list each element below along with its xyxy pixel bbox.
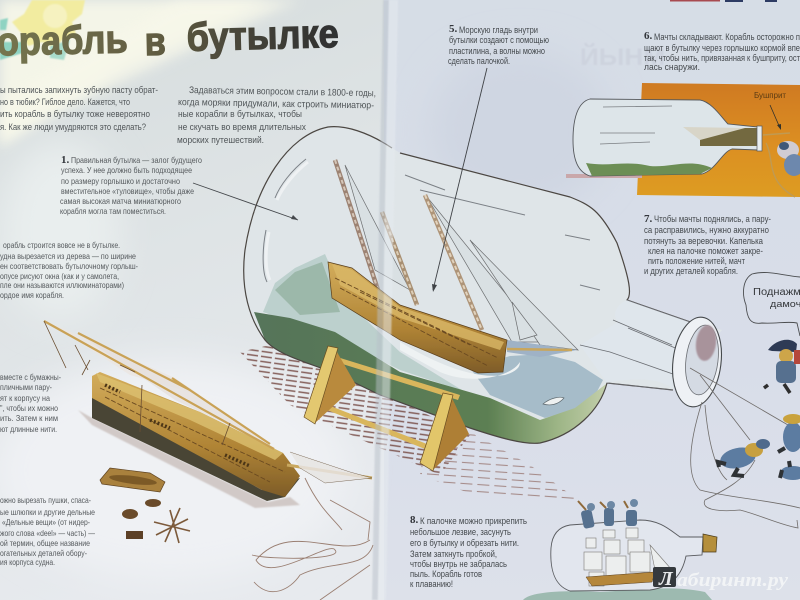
step 6 text: лась снаружи. — [644, 62, 700, 72]
green sea — [586, 163, 712, 176]
ship deck — [586, 572, 655, 586]
step 2 text: орабль строится вовсе не в бутылке. — [3, 240, 120, 250]
sailor pulling rope centre — [718, 439, 770, 476]
gear decoration behind title — [0, 0, 85, 60]
step 6 text — [644, 30, 800, 72]
intro text right: когда моряки придумали, как строить миниатюр- — [178, 97, 374, 111]
step 4 text: ые шлюпки и другие дельные — [0, 507, 95, 517]
step 1 text: успеха. У нее должно быть подходящее — [61, 165, 192, 175]
step 3 text — [0, 372, 61, 434]
sailor seated — [764, 340, 800, 393]
step 2 text: ордое имя корабля. — [0, 290, 64, 300]
intro text right: морских путешествий. — [177, 135, 264, 146]
step 2 text: удна вырезается из дерева — по ширине — [0, 251, 136, 261]
intro text left: ы пытались запихнуть зубную пасту обрат- — [0, 85, 158, 96]
step 6 orange panel with bottle — [566, 83, 800, 197]
watermark — [653, 567, 789, 591]
step 7 text: клея на палочке поможет закре- — [648, 246, 763, 256]
step 4 text: ожно вырезать пушки, спаса- — [0, 495, 91, 505]
step 1 text — [60, 154, 202, 216]
pink shadow — [566, 174, 642, 178]
left model ship — [44, 321, 373, 600]
neck collar — [757, 126, 762, 151]
step 4 text: огательных деталей обору- — [0, 548, 87, 558]
cannon parts — [122, 509, 138, 519]
watermark: Л — [658, 568, 674, 590]
masts — [335, 160, 482, 330]
bowsprit arrow — [770, 105, 781, 130]
sails — [48, 322, 200, 395]
small parts: boat, cannons, wheel — [100, 468, 190, 543]
water — [263, 254, 540, 420]
sailor pulling rope right — [778, 414, 800, 452]
step 8 text: его в бутылку и обрезать нити. — [410, 538, 519, 548]
step 2 text: опусе рисуют окна (как и у самолета, — [0, 271, 119, 281]
step 5 text: сделать палочкой. — [448, 56, 510, 66]
bottle neck — [580, 300, 693, 388]
step 4 text: жого слова «deel» — часть) — — [0, 528, 95, 538]
step 4 text: «Дельные вещи» (от нидер- — [2, 517, 90, 527]
step 1 text: корабля могла там поместиться. — [60, 206, 166, 216]
step 8 text: чтобы внутрь не забралась — [410, 559, 507, 569]
bottle outline — [244, 127, 693, 443]
title — [0, 12, 339, 65]
intro text right: ные корабли в бутылках, чтобы — [178, 109, 302, 120]
gutter — [372, 0, 389, 600]
intro text left: ить корабль в бутылку тоже невероятно — [0, 109, 150, 120]
rigging threads — [252, 478, 373, 600]
big bottle illustration — [244, 127, 726, 443]
sea bed green — [254, 312, 606, 443]
pointer arrow step 5 — [432, 68, 487, 292]
step 2 text: пле они называются иллюминаторами) — [0, 280, 124, 290]
bottle mouth — [668, 314, 726, 410]
bowsprit — [287, 465, 372, 478]
ship shadow — [78, 410, 300, 508]
step 3 text: вместе с бумажны- — [0, 372, 61, 382]
step 8 text: пыль. Корабль готов — [410, 569, 482, 579]
three sailors on bottle — [578, 499, 638, 529]
step 3 text: ить. Затем к ним — [0, 413, 58, 423]
sailor lying — [780, 461, 800, 480]
decorative colour strip at page top — [670, 0, 777, 2]
step 3 text: ют длинные нити. — [0, 424, 57, 434]
glass highlights — [263, 159, 600, 290]
step 5 text: пластилина, а волны можно — [449, 46, 545, 56]
step 5 text: Морскую гладь внутри — [459, 25, 538, 35]
step 6 text: 6. — [644, 30, 652, 42]
bottle glass — [244, 127, 722, 443]
step 7 text: 7. — [644, 213, 652, 225]
step 8 text: небольшое лезвие, засунуть — [410, 527, 511, 537]
sailor pulling thread — [763, 133, 800, 197]
intro text left — [0, 85, 158, 133]
step 7 text — [644, 213, 771, 276]
step 8 text: к плаванию! — [410, 579, 453, 589]
step 8 text: К палочке можно прикрепить — [420, 516, 527, 526]
step 1 text: 1. — [61, 154, 70, 166]
step 5 text: бутылки создают с помощью — [449, 35, 549, 45]
hull — [92, 372, 300, 497]
ghost print-through title: ЙЫНМ — [580, 43, 665, 71]
white sails — [584, 528, 672, 586]
pointer arrow step 1 — [193, 183, 298, 220]
small bottle — [573, 99, 758, 176]
keel — [92, 395, 300, 501]
folded ship — [700, 128, 757, 146]
step 2 text: ен соответствовать бутылочному горлыш- — [0, 261, 138, 271]
intro text right — [177, 85, 376, 146]
foam — [400, 342, 520, 379]
step 3 text: ят к корпусу на — [0, 393, 50, 403]
step 4 text — [0, 495, 95, 567]
intro text left: но в тюбик? Гиблое дело. Кажется, что — [0, 97, 130, 108]
bowsprit — [507, 349, 572, 350]
step 7 text: потянуть за веревочки. Капелька — [644, 236, 763, 246]
step 3 text: ", чтобы их можно — [0, 403, 58, 413]
whale-like foam mark — [543, 397, 564, 405]
speech bubble — [744, 272, 800, 336]
step 7 text: пить положение нитей, мачт — [648, 256, 745, 266]
title: в — [144, 20, 166, 64]
step 4 text: ия корпуса судна. — [0, 557, 55, 567]
bottle — [551, 520, 703, 591]
intro text right: Задаваться этим вопросом стали в 1800-е годы, — [189, 85, 376, 99]
step 7 text: Чтобы мачты поднялись, а пару- — [654, 214, 771, 224]
step 4 text: ой термин, общее название — [0, 538, 90, 548]
sea — [523, 588, 712, 600]
step 7 text: са расправились, нужно аккуратно — [644, 225, 769, 235]
watermark: абиринт.ру — [677, 570, 789, 591]
intro text left: я. Как же люди умудряются это сделать? — [0, 122, 146, 133]
ship hull in bottle — [328, 262, 507, 373]
step 3 text: пличными пару- — [0, 382, 52, 392]
sails — [345, 165, 578, 350]
hatched shadow under big bottle — [240, 345, 578, 500]
step 8 text: Затем заткнуть пробкой, — [410, 549, 497, 559]
capstan wheel — [154, 508, 190, 543]
boat — [100, 468, 165, 492]
step 8 text: 8. — [410, 514, 418, 526]
glass lines — [600, 106, 672, 144]
step 5 text — [448, 23, 549, 66]
cork — [703, 534, 717, 552]
bowsprit label: Бушприт — [754, 91, 786, 100]
step 5 text: 5. — [449, 23, 458, 35]
step 1 text: по размеру горлышко и достаточно — [61, 176, 180, 186]
masts — [44, 321, 274, 449]
intro text right: не скучать во время длительных — [178, 122, 306, 133]
step 2 text — [0, 240, 138, 300]
step 1 text: самая высокая матча миниатюрного — [60, 196, 181, 206]
wooden bottle stand — [304, 346, 469, 471]
bottom bottle with finished ship — [523, 499, 717, 600]
title: бутылке — [186, 12, 339, 60]
step 1 text: Правильная бутылка — залог будущего — [71, 155, 202, 165]
step 7 text: и других деталей корабля. — [644, 266, 738, 276]
step 1 text: вместительное «туловище», чтобы даже — [61, 186, 194, 196]
pull threads — [690, 368, 800, 528]
step 8 text — [410, 514, 527, 589]
